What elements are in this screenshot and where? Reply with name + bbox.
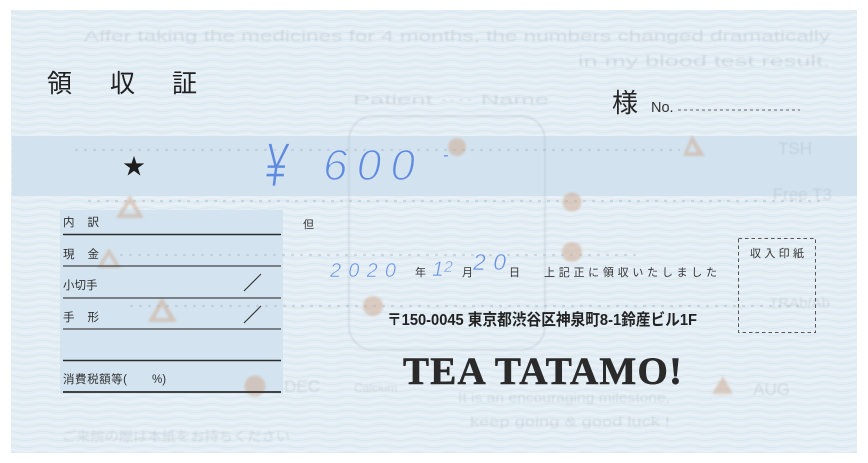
stains: [97, 135, 733, 396]
date labels and receipt statement: 日: [509, 267, 520, 279]
handwritten amount: -: [443, 147, 448, 164]
handwritten date: 2: [443, 259, 453, 276]
revenue stamp box: 収入印紙: [750, 246, 804, 260]
ghost dotted lines: [75, 150, 820, 306]
panel: breakdown rows: 現 金: [63, 248, 100, 261]
title character: 証: [172, 70, 197, 98]
show-through ghost text from reverse side: keep going & good luck !: [470, 414, 670, 429]
handwritten amount: ¥: [265, 131, 291, 200]
title: 領: [47, 70, 72, 98]
date labels and receipt statement: 月: [462, 267, 473, 279]
show-through ghost text from reverse side: ご来院の際は本紙をお持ちください: [62, 429, 290, 444]
handwritten amount: 600: [323, 141, 416, 190]
date labels and receipt statement: [415, 265, 717, 279]
panel: breakdown rows: 消費税額等(: [63, 372, 127, 386]
show-through ghost text from reverse side: It is an encouraging milestone,: [458, 390, 670, 405]
show-through ghost text from reverse side: [62, 28, 832, 444]
revenue stamp box: [738, 238, 816, 332]
handwritten date: 1: [432, 258, 444, 281]
show-through ghost text from reverse side: AUG: [753, 380, 790, 399]
title character: 収: [110, 70, 135, 98]
handwritten amount: [265, 131, 448, 200]
handwritten date: 2020: [329, 260, 396, 282]
handwritten date: 20: [472, 249, 506, 275]
panel: breakdown rows: 手 形: [63, 310, 100, 324]
ghost rounded frame: [349, 116, 545, 350]
show-through ghost text from reverse side: DEC: [284, 377, 320, 396]
panel: breakdown rows: 小切手: [63, 278, 98, 292]
honorific: 様: [612, 88, 638, 118]
shop name: TEA TATAMO!: [403, 350, 682, 393]
icon: star: ★: [123, 154, 145, 179]
show-through ghost text from reverse side: Calcium: [354, 381, 397, 395]
show-through ghost text from reverse side: Patient ···· Name: [353, 92, 549, 107]
show-through ghost text from reverse side: in my blood test result.: [578, 53, 830, 70]
show-through ghost text from reverse side: TRAb/Ab: [769, 295, 830, 312]
panel: breakdown rows: 内 訳: [63, 215, 100, 229]
address: 〒150-0045 東京都渋谷区神泉町8-1鈴産ビル1F: [387, 310, 697, 329]
panel: breakdown rows: [63, 215, 281, 392]
pale blue amount band: [12, 136, 857, 196]
handwritten date: [329, 249, 506, 282]
date labels and receipt statement: 上記正に領収いたしました: [544, 265, 717, 279]
show-through ghost text from reverse side: Free T3: [773, 185, 832, 204]
panel: breakdown rows: %): [152, 374, 166, 386]
proviso label: 但: [303, 218, 314, 231]
receipt number: No.: [651, 100, 674, 116]
show-through ghost text from reverse side: TSH: [778, 139, 812, 158]
show-through ghost text from reverse side: Affer taking the medicines for 4 months, the numbers changed dramatically: [84, 28, 831, 45]
date labels and receipt statement: 年: [415, 265, 426, 279]
panel: breakdown background: [60, 210, 283, 394]
